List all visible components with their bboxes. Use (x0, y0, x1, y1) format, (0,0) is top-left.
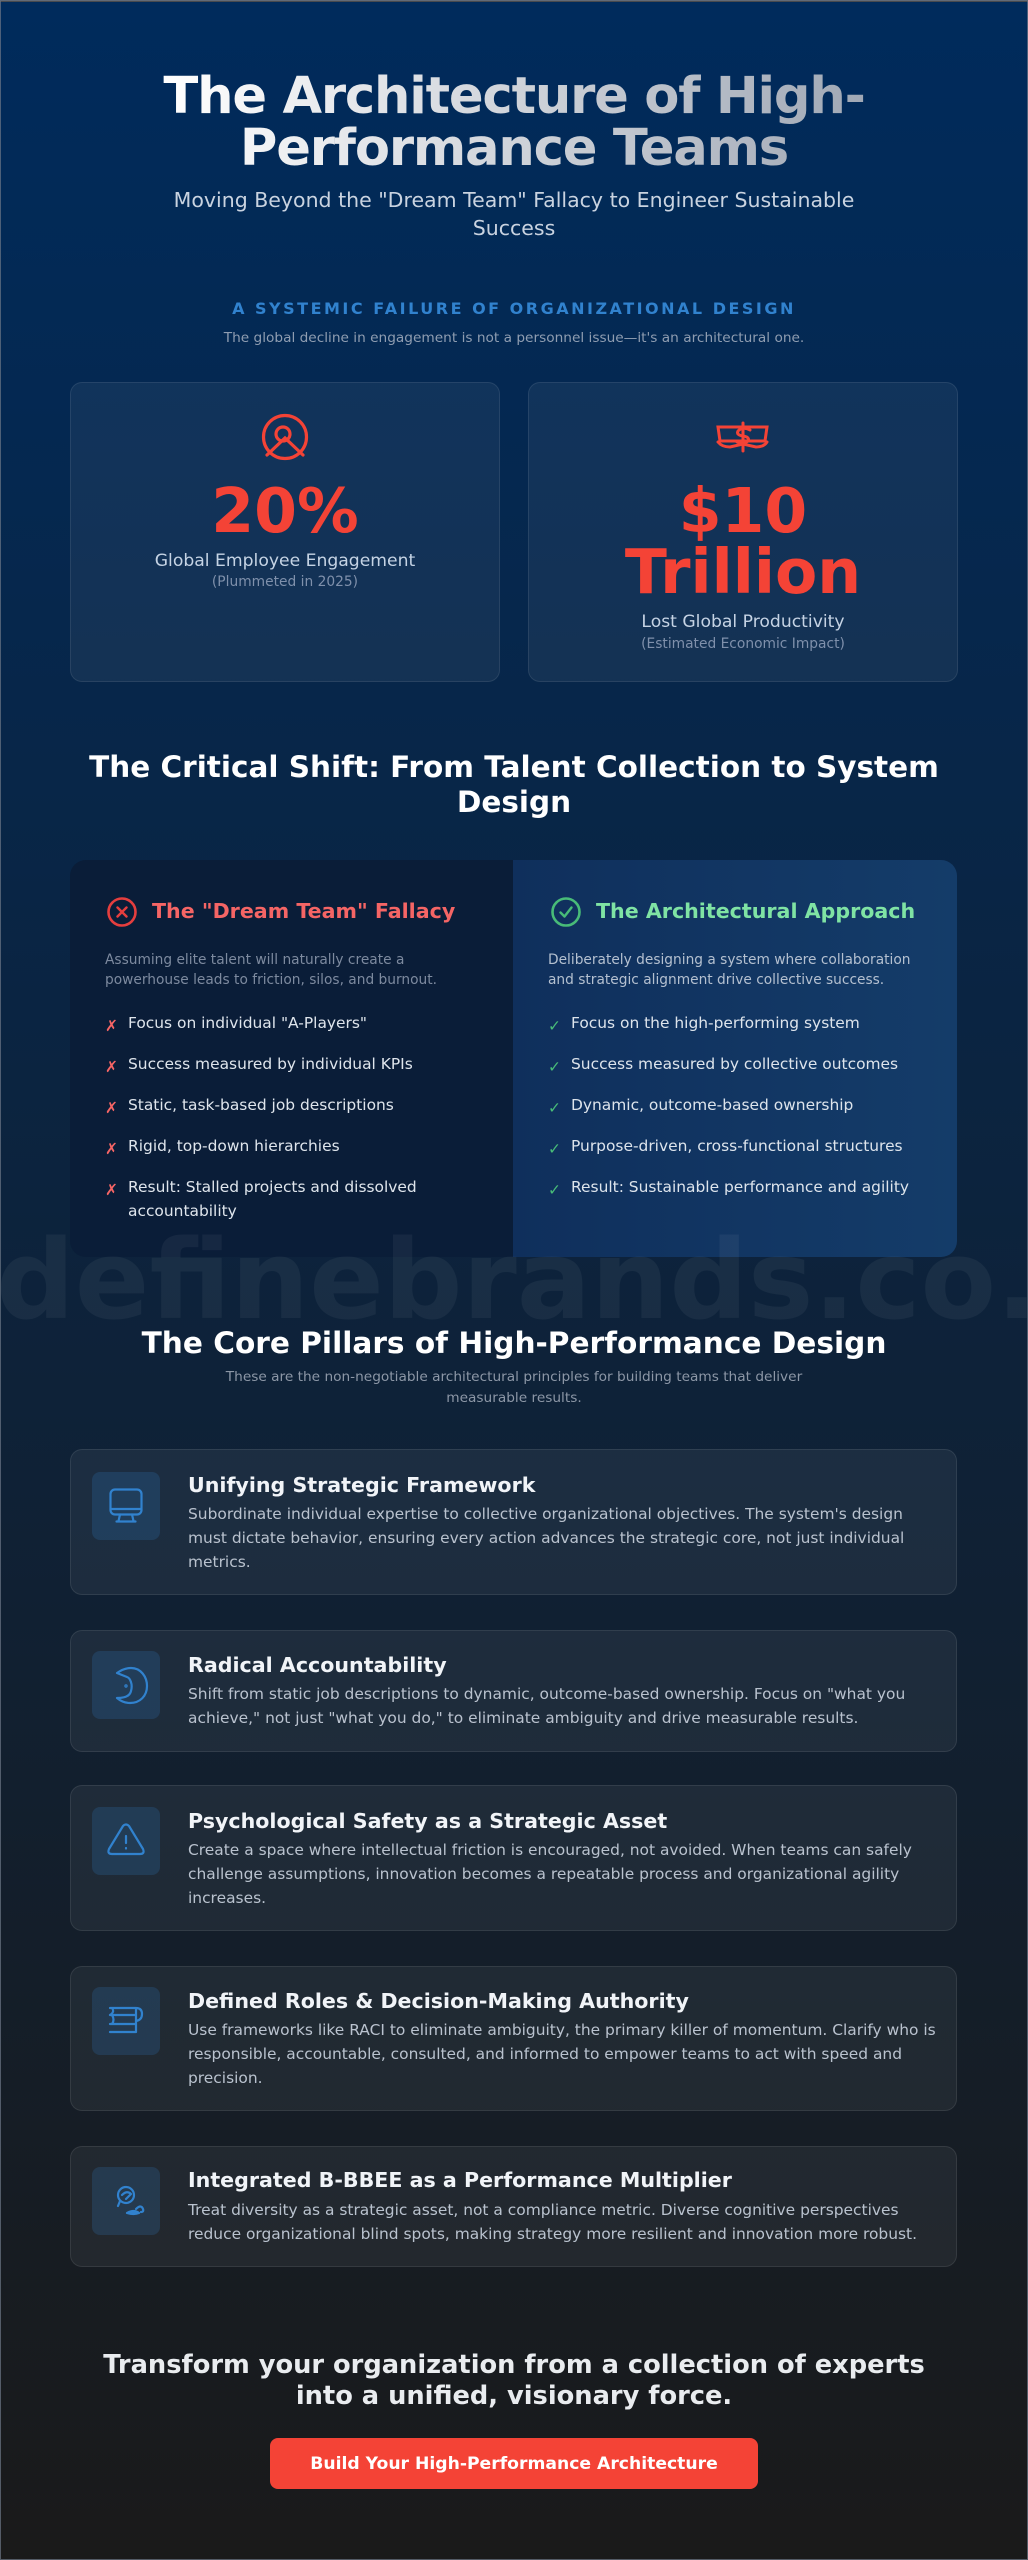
list: fallacy items: Success measured by individual KPIs (128, 1055, 413, 1073)
icon: stacked documents (92, 1987, 160, 2055)
panel description: and strategic alignment drive collective success. (548, 972, 884, 988)
pillar description (188, 2021, 936, 2087)
pillar description: Treat diversity as a strategic asset, not a compliance metric. Diverse cognitive perspectives (188, 2201, 899, 2219)
pillar description: metrics. (188, 1553, 251, 1571)
heading: critical shift: The Critical Shift: From Talent Collection to System (89, 750, 939, 784)
pillar card: defined roles (70, 1966, 957, 2111)
panel: architectural approach (513, 860, 957, 1257)
panel description: powerhouse leads to friction, silos, and burnout. (105, 972, 437, 988)
icon: person with magnifier (92, 2167, 160, 2235)
call to action text (103, 2350, 925, 2411)
section subheading: The global decline in engagement is not a personnel issue—it's an architectural one. (224, 330, 804, 346)
list: approach items: ✓ (548, 1099, 561, 1117)
list: approach items: Success measured by collective outcomes (571, 1055, 898, 1073)
panel description (548, 952, 910, 988)
icon: user circle (262, 414, 308, 460)
subtitle: Success (473, 216, 555, 240)
list: fallacy items: accountability (128, 1202, 237, 1220)
stat value: 20%: 20% (211, 475, 359, 547)
pillar description: increases. (188, 1889, 266, 1907)
icon: x circle (107, 897, 137, 927)
pillar description (188, 2201, 917, 2243)
pillar title: Radical Accountability (188, 1653, 447, 1677)
heading: critical shift: Design (457, 785, 571, 819)
pillar card: radical accountability (70, 1630, 957, 1752)
pillars intro: measurable results. (446, 1390, 582, 1406)
title (163, 66, 865, 178)
list: fallacy items: ✗ (105, 1017, 118, 1035)
pillar description: Subordinate individual expertise to collective organizational objectives. The system's design (188, 1505, 903, 1523)
button (270, 2438, 758, 2489)
list: approach items: ✓ (548, 1140, 561, 1158)
title: The Architecture of High- (163, 66, 865, 126)
pillar description: achieve," not just "what you do," to eliminate ambiguity and drive measurable results. (188, 1709, 858, 1727)
pillar title: Defined Roles & Decision-Making Authority (188, 1989, 689, 2013)
heading: core pillars: The Core Pillars of High-Performance Design (142, 1326, 886, 1360)
call to action text: Transform your organization from a collection of experts (103, 2350, 925, 2380)
list: approach items: ✓ (548, 1017, 561, 1035)
stat label: Global Employee Engagement (155, 551, 415, 571)
panel description: Deliberately designing a system where collaboration (548, 952, 910, 968)
list: approach items (548, 1014, 909, 1199)
title: Performance Teams (240, 118, 788, 178)
stat note: (Plummeted in 2025) (212, 574, 358, 590)
pillar title: Psychological Safety as a Strategic Asset (188, 1809, 667, 1833)
panel heading: The Architectural Approach (596, 899, 915, 923)
call to action text: into a unified, visionary force. (296, 2381, 732, 2411)
pillar description: Use frameworks like RACI to eliminate ambiguity, the primary killer of momentum. Clarify who is (188, 2021, 936, 2039)
list: fallacy items: Static, task-based job descriptions (128, 1096, 394, 1114)
pillar title: Unifying Strategic Framework (188, 1473, 535, 1497)
pillar description (188, 1505, 904, 1571)
pillar card: integrated b-bbee (70, 2146, 957, 2267)
pillar description: precision. (188, 2069, 263, 2087)
button: Build Your High-Performance Architecture (310, 2454, 718, 2474)
heading: critical shift (89, 750, 939, 819)
list: fallacy items: ✗ (105, 1058, 118, 1076)
list: fallacy items: Focus on individual "A-Players" (128, 1014, 367, 1032)
icon: crescent (92, 1651, 160, 1719)
stat value: $10 Trillion: Trillion (625, 536, 861, 608)
list: approach items: Dynamic, outcome-based ownership (571, 1096, 853, 1114)
pillar title: Integrated B-BBEE as a Performance Multiplier (188, 2168, 732, 2192)
list: fallacy items: ✗ (105, 1099, 118, 1117)
pillar description (188, 1685, 905, 1727)
pillars intro: These are the non-negotiable architectural principles for building teams that deliver (226, 1369, 802, 1385)
stat value: $10 Trillion: $10 (679, 475, 807, 547)
pillar description: challenge assumptions, innovation becomes a repeatable process and organizational agility (188, 1865, 899, 1883)
list: approach items: Purpose-driven, cross-functional structures (571, 1137, 903, 1155)
stat note: (Estimated Economic Impact) (641, 636, 845, 652)
list: fallacy items: ✗ (105, 1140, 118, 1158)
icon: check circle (551, 897, 581, 927)
panel: dream team fallacy (70, 860, 513, 1257)
list: approach items: Result: Sustainable performance and agility (571, 1178, 909, 1196)
panel heading: The "Dream Team" Fallacy (152, 899, 455, 923)
pillar description: reduce organizational blind spots, making strategy more resilient and innovation more robust. (188, 2225, 917, 2243)
icon: monitor (92, 1472, 160, 1540)
stat label: Lost Global Productivity (641, 612, 845, 632)
list: fallacy items (105, 1014, 417, 1220)
list: fallacy items: Rigid, top-down hierarchies (128, 1137, 340, 1155)
subtitle: Moving Beyond the "Dream Team" Fallacy to Engineer Sustainable (174, 188, 854, 212)
pillars intro (226, 1369, 802, 1406)
pillar description (188, 1841, 912, 1907)
panel: engagement stat (70, 382, 500, 682)
icon: banknote (716, 422, 769, 452)
pillar description: Shift from static job descriptions to dynamic, outcome-based ownership. Focus on "what you (188, 1685, 905, 1703)
pillar card: psychological safety (70, 1785, 957, 1931)
list: approach items: Focus on the high-performing system (571, 1014, 860, 1032)
list: approach items: ✓ (548, 1181, 561, 1199)
panel description: Assuming elite talent will naturally create a (105, 952, 404, 968)
panel: productivity stat (528, 382, 958, 682)
list: approach items: ✓ (548, 1058, 561, 1076)
section heading: systemic failure: A SYSTEMIC FAILURE OF ORGANIZATIONAL DESIGN (232, 299, 796, 318)
pillar description: must dictate behavior, ensuring every action advances the strategic core, not just individual (188, 1529, 904, 1547)
pillar description: Create a space where intellectual friction is encouraged, not avoided. When teams can safely (188, 1841, 912, 1859)
pillar card: strategic framework (70, 1449, 957, 1595)
pillar description: responsible, accountable, consulted, and informed to empower teams to act with speed and (188, 2045, 902, 2063)
stat value: $10 Trillion (625, 475, 861, 608)
list: fallacy items: ✗ (105, 1181, 118, 1199)
subtitle (174, 188, 854, 240)
panel description (105, 952, 437, 988)
icon: warning triangle (92, 1807, 160, 1875)
list: fallacy items: Result: Stalled projects and dissolved (128, 1178, 417, 1196)
